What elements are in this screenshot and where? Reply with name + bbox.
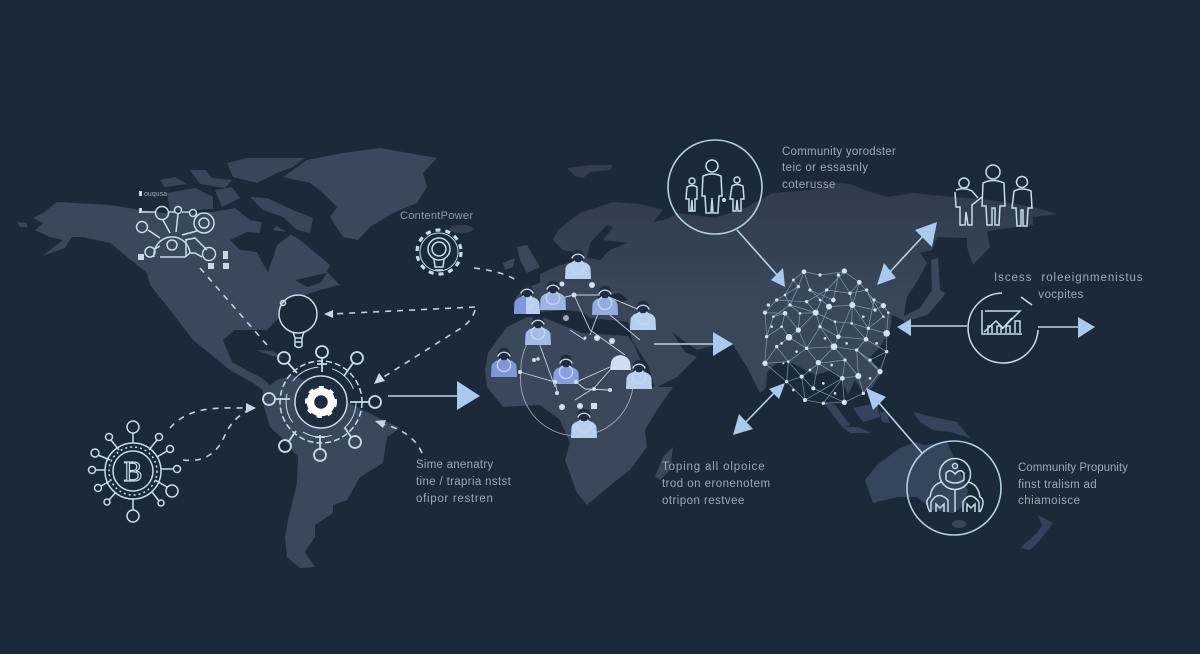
network: Africa and Europe community [491,250,656,438]
icon: gear with bulb [417,230,461,274]
icon: small right person [730,177,744,211]
dashed arrow to bulb [324,307,475,318]
map: Southeast Asia islands [823,402,970,438]
right person [1012,176,1032,226]
double arrow: network to lower left [733,383,785,435]
text block: lower left: ofipor restren [416,493,494,505]
text block: top right [782,146,896,191]
hub satellites [263,346,381,461]
dashed link: gear to Europe [474,268,518,281]
connection lines [520,295,640,436]
map: Greenland [283,148,437,240]
arrow: chart to right [1038,317,1095,338]
text block: lower left [416,459,512,505]
icon: small left person [686,178,697,211]
arrow: Australia community to network [866,388,922,453]
map: Arctic islands [160,158,313,233]
text block: lower left: tine / trapria nstst [416,476,512,488]
icon: node diagram top left [136,191,229,269]
text block: lower right: chiamoisce [1018,495,1081,507]
map: Japan [900,258,945,322]
text block: lower right: Community Propunity [1018,462,1128,474]
text block: middle right [994,272,1144,301]
nodes [518,282,615,410]
globe nodes [762,268,890,405]
map: Baltic Sea [587,225,627,260]
map: Ireland [503,258,515,270]
hub gear [306,388,336,416]
text block: lower middle: otripon restvee [662,495,745,507]
map: Australia [865,442,968,513]
map: Caribbean islands [256,350,285,358]
map: Tasmania [952,520,966,528]
map: UK [517,245,540,273]
text block: lower right [1018,462,1128,507]
text block: middle right: Iscess roleeignmenistus [994,272,1144,284]
map: St Lawrence gulf [295,273,327,287]
text block: lower middle: Toping all olpoice [662,461,766,473]
icon: central hub [263,346,381,461]
map: Baja gulf [178,327,188,343]
double arrow: people to network [877,222,937,285]
icon: community circle top [668,140,762,234]
map: Madagascar [655,447,673,480]
label: ContentPower: ContentPower [400,210,473,222]
icon: chart circle [968,293,1038,363]
chart glyph [982,310,1022,334]
map: Svalbard [567,165,613,178]
icon: three people [955,165,1032,226]
world map [17,148,1057,568]
arrow: hub to Africa [388,381,480,410]
map: North America [33,202,340,390]
arrow: Africa to Asia [654,332,733,356]
map: Hudson Bay [230,212,293,272]
map: Aleutian island [17,222,28,227]
map: Eurasia [513,183,1057,395]
network globe [762,268,890,405]
text block: top right: teic or essasnly [782,162,868,174]
text block: top right: coterusse [782,179,836,191]
dashed arrow to hub [374,310,475,384]
center person [982,165,1005,225]
dashed arrow: text to hub [375,420,422,453]
text block: lower middle [662,461,770,507]
dashed arrow: bitcoin to hub lower [183,409,250,460]
text block: lower right: finst tralism ad [1018,479,1097,491]
small label: ouqusa [144,191,167,198]
left person [955,178,982,225]
dashed arrow: bitcoin to hub upper [170,403,256,428]
icon: bitcoin network [88,421,180,522]
map: Black Sea [598,293,628,306]
text block: top right: Community yorodster [782,146,896,158]
map: New Zealand [1020,515,1053,550]
double arrow: chart to network [897,319,967,336]
icon: community circle lower right [907,441,1001,535]
dashed link: top-left icon to hub [200,268,267,345]
globe edges [765,272,888,403]
map: South America [263,375,400,568]
bitcoin letter: B [124,457,142,488]
text block: lower middle: trod on eronenotem [662,478,770,490]
map: Iceland [449,225,473,233]
half tone on person [514,297,526,314]
icon: light bulb [279,295,317,348]
person figures [491,250,656,438]
icon: large person [702,160,722,213]
text block: middle right: vocpites [1038,289,1084,301]
map: Africa [485,317,673,505]
text block: lower left: Sime anenatry [416,459,493,471]
arrow: community to network [737,230,785,287]
